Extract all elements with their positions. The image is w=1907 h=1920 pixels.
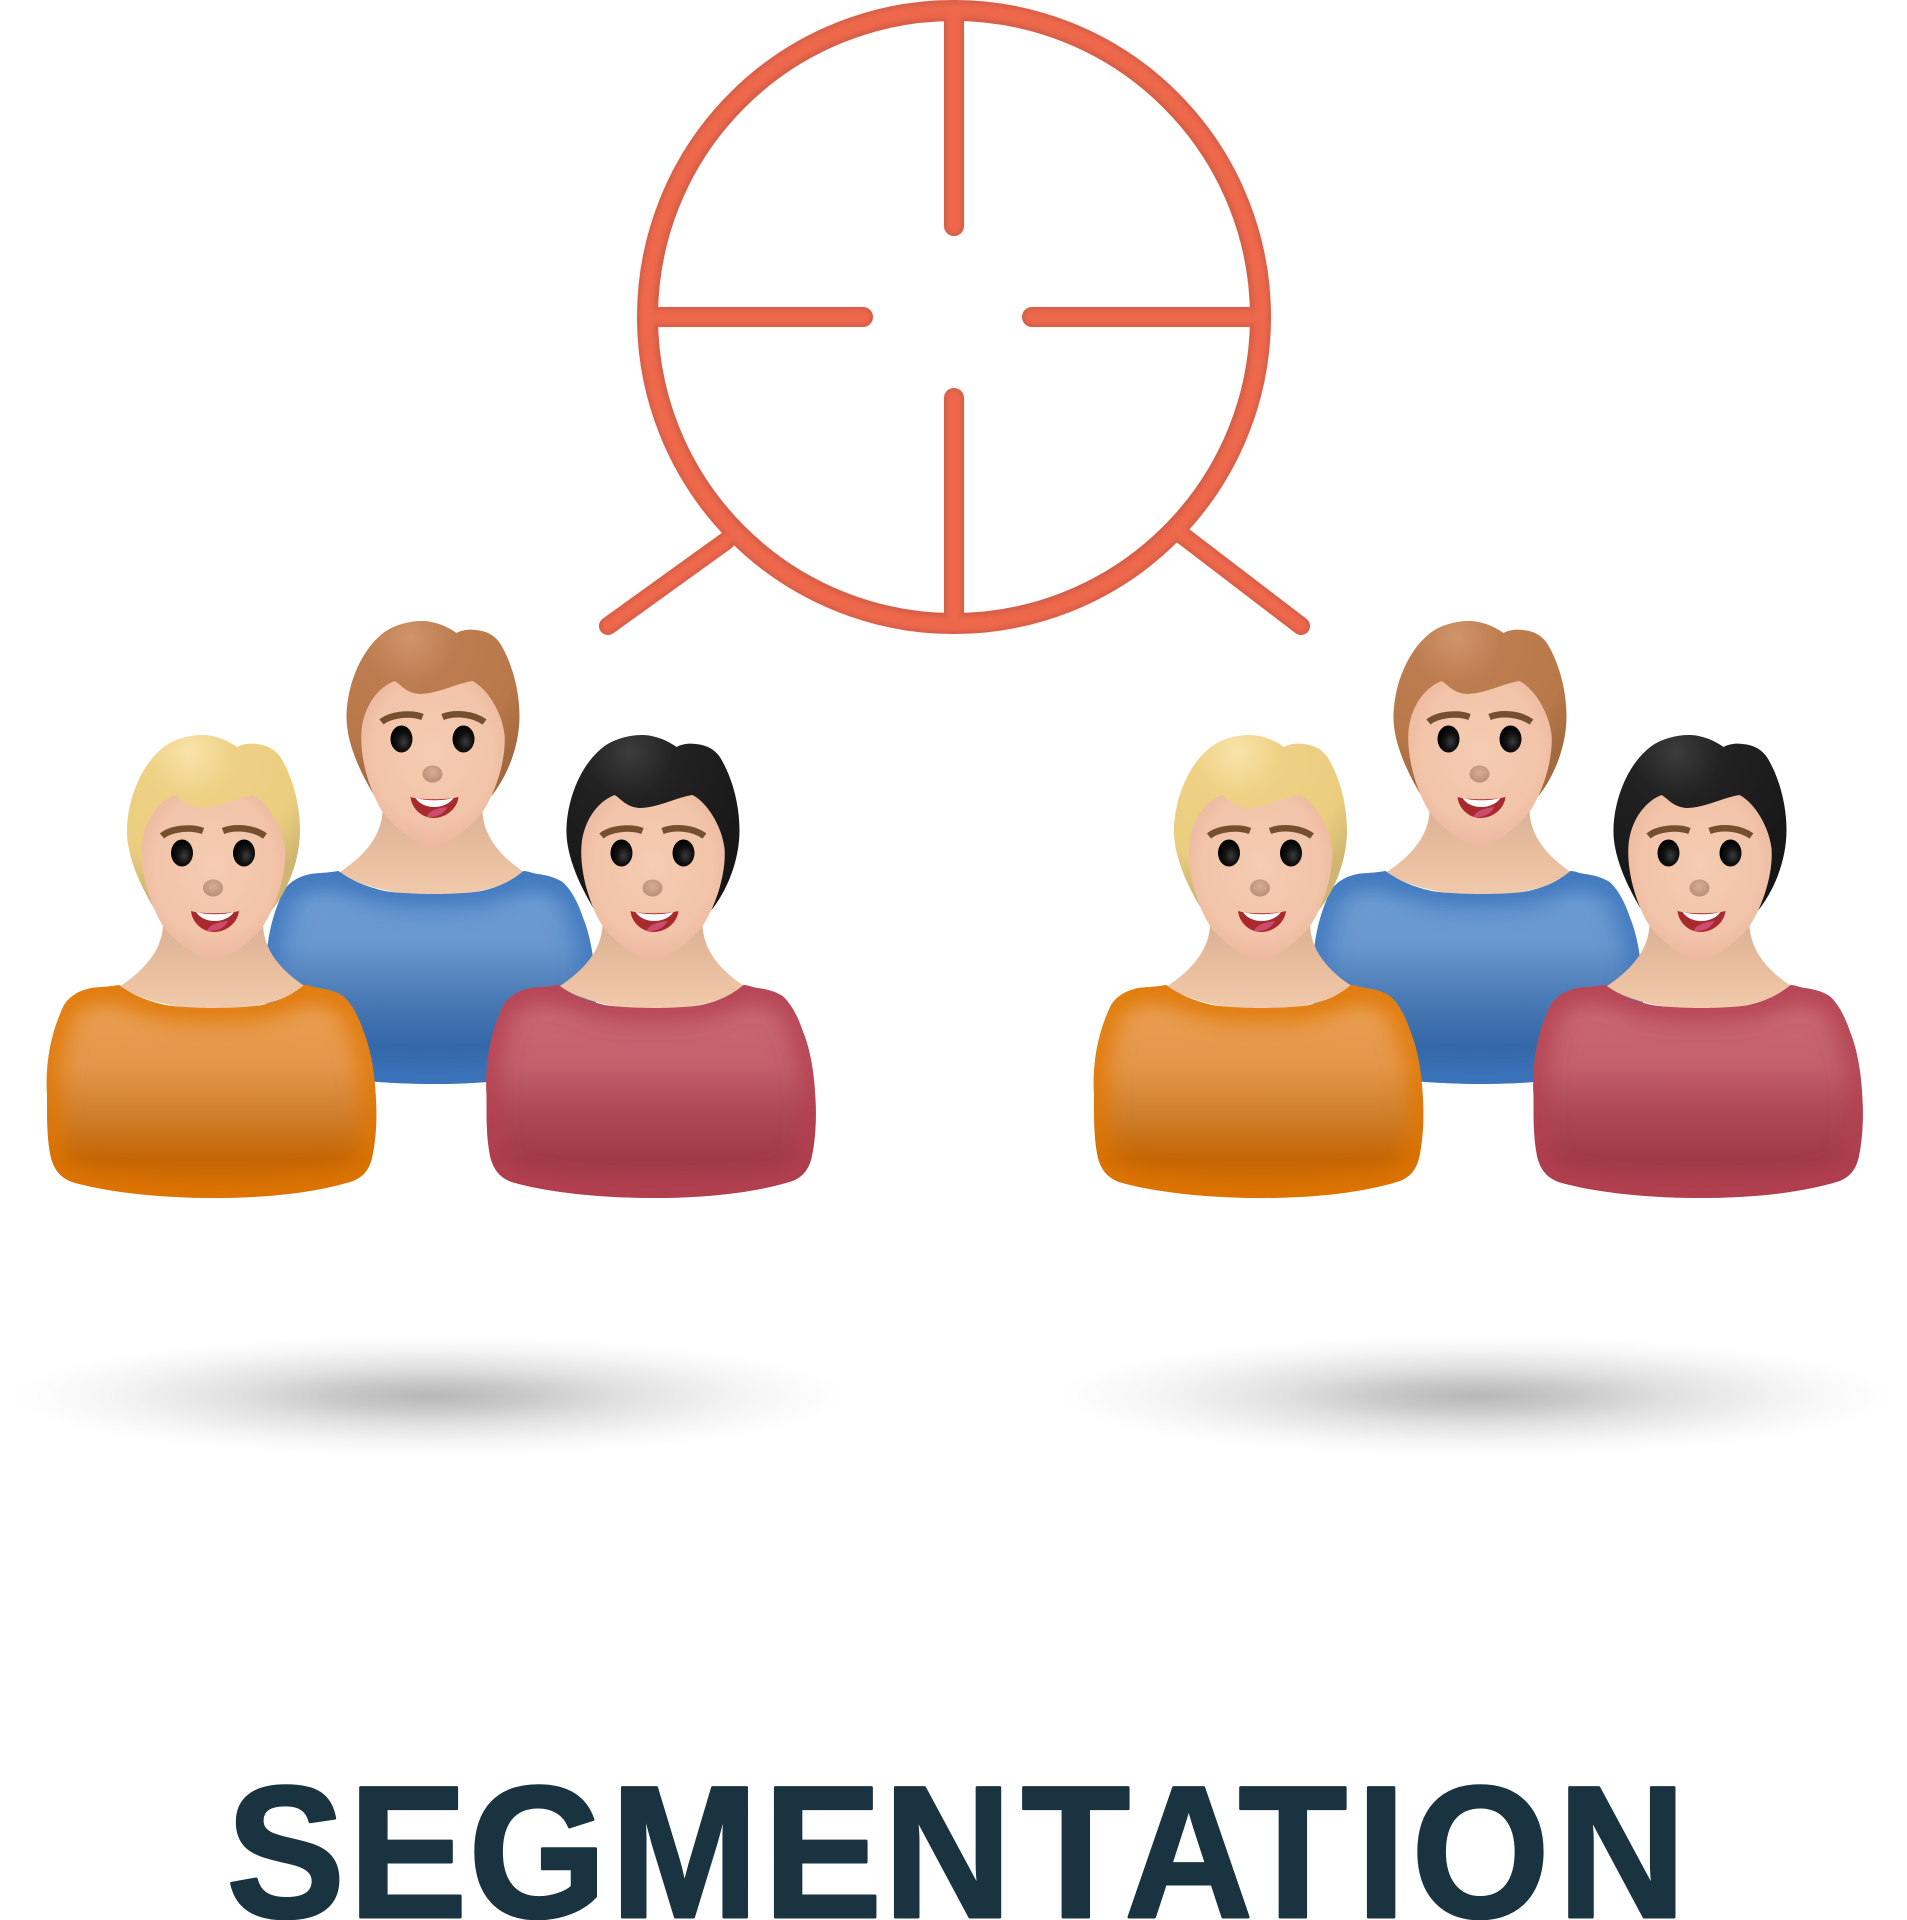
- ground shadow: left group: [14, 1336, 844, 1456]
- person: blond hair, orange shirt: [1094, 735, 1423, 1198]
- person: brown hair, blue shirt: [1313, 621, 1643, 1084]
- person: brown hair, blue shirt: [266, 621, 596, 1084]
- person: blond hair, orange shirt: [47, 735, 376, 1198]
- ground shadow: right group: [1061, 1336, 1891, 1456]
- person: black hair, red shirt: [1533, 735, 1863, 1198]
- right group of people: [1094, 621, 1863, 1198]
- icon: target crosshair with legs: [608, 10, 1301, 626]
- person: black hair, red shirt: [486, 735, 816, 1198]
- left group of people: [47, 621, 816, 1198]
